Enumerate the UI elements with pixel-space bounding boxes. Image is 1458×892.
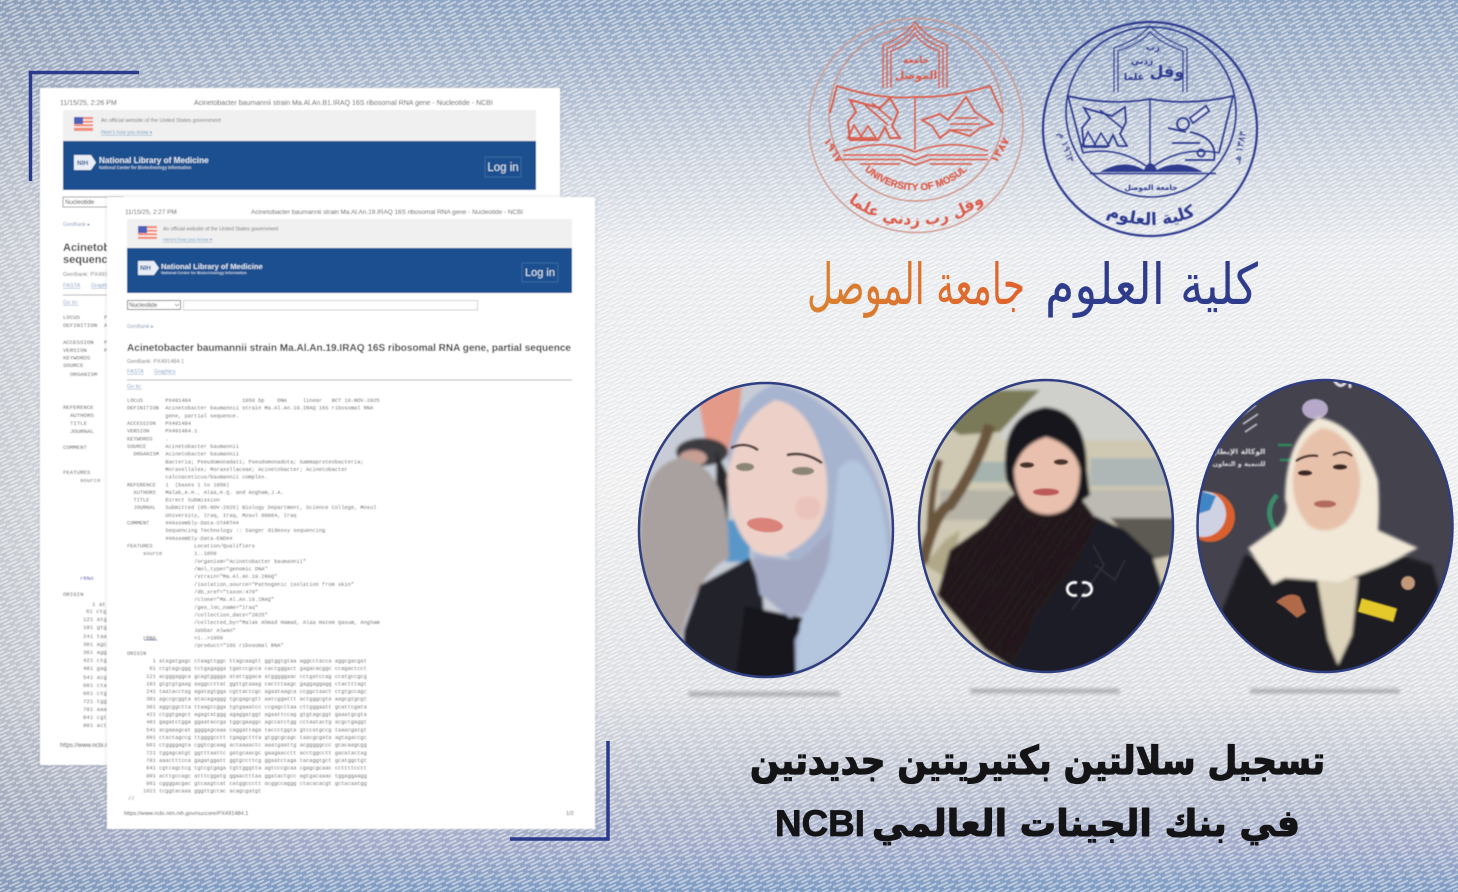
map right page: [922, 97, 993, 138]
government banner: [127, 219, 572, 248]
GenBank flat-file record: 841 cgtcagctcg tgtcgtgaga tgttgggtta agtcccgcaa cgagcgcaac ccttttcctt: [127, 766, 367, 772]
record fields, left column: LOCUS: [63, 314, 81, 321]
neck wrap: [752, 530, 832, 618]
logo: College of Science (blue): ١٣٨٣ هـ: [1232, 130, 1249, 166]
hijab: [728, 384, 893, 678]
NLM navy banner: National Library of Medicine: [161, 262, 263, 271]
search row: [128, 300, 478, 310]
document page: front GenBank record: [107, 197, 595, 829]
GenBank flat-file record: 781 aaactttcca gagatggatt ggtgccttcg ggaatctaga tacaggtgct gcatggctgt: [127, 758, 367, 764]
document page: front GenBank record: GenBank: PX491484.1: [127, 359, 184, 365]
record heading and links: GenBank ▸: [63, 222, 90, 228]
map left page: [848, 98, 900, 140]
document page: back GenBank record: A: [104, 322, 108, 329]
record fields, left column: ORGANISM: [70, 371, 98, 378]
record fields, left column: VERSION: [63, 347, 87, 354]
shadow under portraits: [688, 689, 1400, 696]
record fields, left column: COMMENT: [63, 444, 87, 451]
GenBank flat-file record: rRNA <1..>1050: [127, 635, 223, 641]
GenBank flat-file record: /db_xref="taxon:470": [127, 590, 258, 596]
GenBank flat-file record: KEYWORDS .: [127, 436, 169, 442]
document page: front GenBank record: Acinetobacter baumannii strain Ma.Al.An.19.IRAQ 16S ribosomal RNA gene, partial sequence: [127, 343, 572, 354]
GenBank flat-file record: ACCESSION PX491484: [127, 421, 191, 427]
GenBank flat-file record: LOCUS PX491484 1050 bp DNA linear BCT 10-NOV-2025: [127, 398, 380, 404]
record fields, left column: KEYWORDS: [63, 354, 91, 362]
small university name: جامعة الموصل: [1124, 183, 1178, 192]
GenBank flat-file record: Bacteria; Pseudomonadati; Pseudomonadota; Gammaproteobacteria;: [127, 459, 364, 465]
person in background: [676, 438, 728, 466]
NLM navy banner: National Center for Biotechnology Information: [161, 270, 247, 275]
GenBank flat-file record: /clone="Ma.Al.An.19.IRAQ": [127, 597, 274, 603]
seat: [640, 458, 729, 660]
hijab: [1248, 417, 1418, 584]
document page: back GenBank record: https://www.ncbi.nlm.nih.gov: [60, 743, 136, 749]
GenBank flat-file record: gene, partial sequence.: [127, 413, 239, 419]
document page: back GenBank record: Acinetobacter baumannii: [63, 242, 194, 254]
GenBank flat-file record: ##Assembly-Data-END##: [127, 536, 233, 542]
portrait: researcher three: [1180, 375, 1457, 680]
tree: [945, 390, 1040, 435]
government banner: An official website of the United States government: [163, 226, 279, 232]
GenBank flat-file record: 61 ctgtagcggg tctgagagga tgatccgcca cactgggact gagacacggc ccagactcct: [127, 666, 367, 672]
record fields, left column: 1 at: [92, 601, 106, 608]
GenBank flat-file record: /organism="Acinetobacter baumannii": [127, 559, 306, 565]
GenBank flat-file record: 481 gagatctgga ggaataccga tggcgaaggc agccatctgg cctaatactg acgctgaggt: [127, 720, 367, 726]
document page: front GenBank record: Graphics: [154, 369, 176, 375]
hijab: [1005, 407, 1090, 510]
GenBank flat-file record: FEATURES Location/Qualifiers: [127, 544, 255, 550]
calligraphy: College of Science: كلية العلوم: [1045, 252, 1258, 318]
GenBank flat-file record: 181 gtgtgtgaag aaggccttat ggttgtaaag cactttaagc gaggaggagg ctactttagt: [127, 681, 367, 687]
NLM navy banner: [63, 141, 536, 190]
arch with university name: الموصل: [895, 69, 937, 82]
scarf flap: [796, 460, 888, 672]
GenBank flat-file record: 961 cggggacgac gtcaagtcat catggccctt acggccaggg ctacacacgt gctacaatgg: [127, 781, 367, 787]
GenBank flat-file record: 421 ctggtgagct agagtatggg agaggatggt agaattccag gtgtagcggt gaaatgcgta: [127, 712, 368, 718]
brows, eyes, lips, badge and brooch: [1276, 452, 1415, 622]
document page: front GenBank record: FASTA: [127, 369, 144, 375]
college name: كلية العلوم: [1105, 203, 1194, 226]
record fields, left column: 661 ctg: [83, 690, 107, 697]
headline line two: NCBI: [775, 803, 865, 844]
GenBank flat-file record: 601 ctactagccg ttggggcctt tgaggcttta gtggcgcagc taacgcgata agtagaccgc: [127, 735, 367, 741]
print header: 11/15/25, 2:26 PM: [60, 100, 117, 107]
record fields, left column: AUTHORS: [70, 412, 94, 419]
record fields, left column: 901 act: [83, 722, 107, 729]
NLM navy banner: National Center for Biotechnology Information: [99, 165, 192, 170]
record fields, left column: DEFINITION: [63, 322, 97, 329]
record fields, left column: 241 taa: [83, 633, 107, 640]
GenBank flat-file record: JOURNAL Submitted (05-NOV-2025) Biology Department, Science College, Mosul: [127, 505, 376, 511]
brows, eyes and lips: [731, 445, 822, 534]
GenBank flat-file record: 241 taatacctag agatagtgga cgttactcgc agaataagca ccggctaact ctgtgccagc: [127, 689, 367, 695]
GenBank flat-file record: 541 acgaaagcat ggggagcaaa caggattaga taccctggta gtccatgccg taaacgatgt: [127, 727, 367, 733]
corner bracket: bottom right: [510, 741, 608, 839]
microscope icon: [1168, 106, 1214, 160]
university english name: UNIVERSITY OF MOSUL: [865, 164, 968, 192]
GenBank flat-file record: /collection_date="2025": [127, 612, 268, 618]
document page: back GenBank record: sequence: [63, 254, 114, 266]
record fields, left column: 361 agg: [83, 649, 107, 656]
calligraphy: University of Mosul: جامعة الموصل: [807, 252, 1025, 318]
document page: back GenBank record: Go to:: [63, 300, 79, 306]
GenBank flat-file record: 1 atagatgagc ctaagttggc ttagcaagtt ggtggtgtaa aggcctacca aggcgacgat: [127, 658, 367, 664]
blue garment: [726, 520, 750, 562]
GenBank flat-file record: Moraxellales; Moraxellaceae; Acinetobacter; Acinetobacter: [127, 467, 348, 473]
government banner: [63, 110, 536, 141]
scarf: [937, 490, 1097, 668]
rRNA link highlight: [144, 639, 157, 641]
document page: back GenBank record: Graphics: [91, 283, 114, 289]
arch with university name: [883, 22, 947, 88]
record fields, left column: 61 ctg: [86, 608, 106, 615]
record fields, left column: JOURNAL: [70, 428, 94, 435]
record fields, left column: rRNA: [80, 575, 94, 582]
backdrop emblems: للتنمية و التعاون: [1213, 460, 1265, 468]
NLM navy banner: National Library of Medicine: [99, 156, 209, 165]
NLM navy banner: Log in: [525, 267, 555, 279]
headline line two: في بنك الجينات العالمي: [872, 802, 1300, 845]
face: [1293, 428, 1360, 531]
document page: back GenBank record: P: [104, 347, 108, 354]
record fields, left column: ORIGIN: [63, 591, 83, 598]
coat: [1012, 516, 1163, 680]
record fields, left column: 301 agc: [83, 641, 107, 648]
GenBank flat-file record: /isolation_source="Pathogenic isolation from skin": [127, 582, 354, 588]
record fields, left column: 181 gtg: [83, 624, 107, 631]
black top: [738, 608, 804, 676]
record fields, left column: ACCESSION: [63, 339, 94, 346]
eyes, lips and brooch: [1020, 459, 1125, 610]
GenBank flat-file record: TITLE Direct Submission: [127, 498, 220, 504]
face: [1014, 437, 1080, 515]
record fields, left column: 121 atg: [83, 616, 107, 623]
jacket: [1221, 554, 1440, 671]
GenBank flat-file record: 301 agccgcggta atacagaggg tgcgagcgtt aatcggattt actgggcgta aagcgtgcgt: [127, 697, 367, 703]
NLM navy banner: Log in: [487, 162, 519, 174]
NLM navy banner: NIH: [140, 265, 151, 272]
GenBank flat-file record: Sequencing Technology :: Sanger dideoxy sequencing: [127, 528, 325, 534]
record fields, left column: 481 gag: [83, 665, 107, 672]
arch with motto: [1114, 26, 1187, 92]
GenBank flat-file record: University, Iraq, Iraq, Mosul 00964, Iraq: [127, 513, 296, 519]
record fields, left column: SOURCE: [63, 362, 84, 369]
print header: 11/15/25, 2:27 PM: [125, 209, 177, 216]
GenBank flat-file record: DEFINITION Acinetobacter baumannii strain Ma.Al.An.19.IRAQ 16S ribosomal RNA: [127, 406, 374, 412]
document page: front GenBank record: 1/2: [566, 811, 574, 817]
arch with motto: رب: [1146, 43, 1160, 53]
document page: back GenBank record: P: [104, 314, 108, 321]
search row: Nucleotide: [129, 303, 158, 309]
corner bracket: top left: [30, 72, 139, 181]
search row: Nucleotide: [65, 199, 95, 206]
blouse: [1317, 578, 1358, 665]
GenBank flat-file record: ORIGIN: [127, 651, 146, 657]
headline line one: تسجيل سلالتين بكتيريتين جديدتين: [750, 739, 1325, 784]
GenBank flat-file record: VERSION PX491484.1: [127, 429, 197, 435]
GenBank flat-file record: 1021 tcggtacaaa gggttgctac acagcgatgt: [127, 789, 261, 795]
GenBank flat-file record: AUTHORS Malak,A.H., Alaa,H.Q. and Angham,J.A.: [127, 490, 284, 496]
GenBank flat-file record: 121 acgggaggca gcagtgggga atattggaca atgggggaac cctgatccag ccatgccgcg: [127, 674, 367, 680]
arch with university name: جامعة: [903, 56, 929, 66]
portrait: researcher one: [630, 375, 900, 685]
GenBank flat-file record: Jabbar Alwan": [127, 628, 236, 634]
document page: back GenBank record: P: [104, 339, 108, 346]
backdrop emblems: الوكالة الإبطار: [1212, 447, 1265, 456]
NLM navy banner: NIH: [77, 160, 88, 167]
jacket: [681, 557, 766, 672]
NLM navy banner: [127, 248, 572, 293]
GenBank flat-file record: /product="16S ribosomal RNA": [127, 643, 284, 649]
record fields, left column: 721 tgg: [83, 698, 107, 705]
GenBank flat-file record: /strain="Ma.Al.An.19.IRAQ": [127, 574, 277, 580]
portrait: researcher two: [915, 375, 1177, 680]
government banner: An official website of the United States government: [101, 118, 221, 124]
record fields, left column: source: [80, 477, 101, 484]
record fields, left column: 781 aaa: [83, 706, 107, 713]
cars in background: [972, 462, 1005, 482]
record fields, left column: REFERENCE: [63, 404, 94, 411]
search row: [63, 197, 123, 207]
GenBank flat-file record: /collected_by="Malak Ahmad Hamad, Alaa Hatem Qasum, Angham: [127, 620, 380, 626]
document page: back GenBank record: FASTA: [63, 283, 81, 289]
founding dates: ١٩٦٧: [821, 135, 846, 165]
GenBank flat-file record: 901 acttgccagc atttcggatg ggaactttaa ggatactgcc agtgacaaac tggaggaagg: [127, 773, 367, 779]
GenBank flat-file record: 361 aggcggctta ttaagtcgga tgtgaaatcc ccgagcttaa cttgggaatt gcattcgata: [127, 704, 368, 710]
government banner: Here's how you know ▾: [163, 237, 213, 243]
government banner: Here's how you know ▾: [101, 130, 153, 136]
GenBank flat-file record: calcoaceticus/baumannii complex.: [127, 475, 268, 481]
motto: وقل رب زدني علما: [849, 192, 984, 230]
document page: front GenBank record: //: [128, 796, 134, 802]
record fields, left column: 541 acg: [83, 674, 107, 681]
document page: front GenBank record: Go to:: [127, 384, 142, 390]
open book: [830, 86, 1002, 113]
record fields, left column: FEATURES: [63, 469, 91, 476]
GenBank flat-file record: /geo_loc_name="Iraq": [127, 605, 258, 611]
arch with motto: علما: [1124, 72, 1144, 83]
print header: Acinetobacter baumannii strain Ma.Al.An.B1.IRAQ 16S ribosomal RNA gene - Nucleotide - NCBI: [194, 100, 493, 107]
GenBank flat-file record: ORGANISM Acinetobacter baumannii: [127, 452, 239, 458]
record heading and links: GenBank ▸: [127, 324, 154, 330]
GenBank flat-file record: SOURCE Acinetobacter baumannii: [127, 444, 239, 450]
logo: University of Mosul (red): ١٣٨٧: [988, 135, 1012, 165]
document page: back GenBank record: [0, 0, 560, 765]
curtain: [698, 386, 742, 460]
GenBank flat-file record: COMMENT ##Assembly-Data-START##: [127, 521, 240, 527]
record fields, left column: TITLE: [70, 420, 88, 427]
arch with motto: وقل: [1150, 62, 1184, 81]
open book: [1068, 96, 1233, 153]
logo: University of Mosul (red): [808, 17, 1024, 234]
record fields, left column: 601 cta: [83, 682, 107, 689]
face: [727, 400, 827, 556]
document page: back GenBank record: GenBank: PX491483.1: [63, 272, 122, 278]
GenBank flat-file record: 721 tggagcatgt ggtttaattc gatgcaacgc gaagaacctt acctggcctt gacatactag: [127, 750, 367, 756]
arch with motto: زدني: [1131, 57, 1153, 67]
map left page: [1082, 107, 1127, 147]
founding dates: ١٩٦٣ م: [1055, 131, 1076, 164]
record fields, left column: 841 cgt: [83, 714, 107, 721]
GenBank flat-file record: source 1..1050: [127, 551, 217, 557]
document page: front GenBank record: https://www.ncbi.nlm.nih.gov/nuccore/PX491484.1: [124, 811, 248, 817]
GenBank flat-file record: /mol_type="genomic DNA": [127, 567, 268, 573]
backdrop emblems: [1180, 380, 1350, 542]
print header: Acinetobacter baumannii strain Ma.Al.An.19.IRAQ 16S ribosomal RNA gene - Nucleotide - NCBI: [251, 209, 523, 216]
GenBank flat-file record: REFERENCE 1 (bases 1 to 1050): [127, 482, 229, 488]
logo: College of Science (blue): [1041, 20, 1259, 238]
record fields, left column: 421 ctg: [83, 657, 107, 664]
GenBank flat-file record: 661 ctggggagta cggtcgcaag actaaaactc aaatgaattg acgggggccc gcacaagcgg: [127, 743, 367, 749]
